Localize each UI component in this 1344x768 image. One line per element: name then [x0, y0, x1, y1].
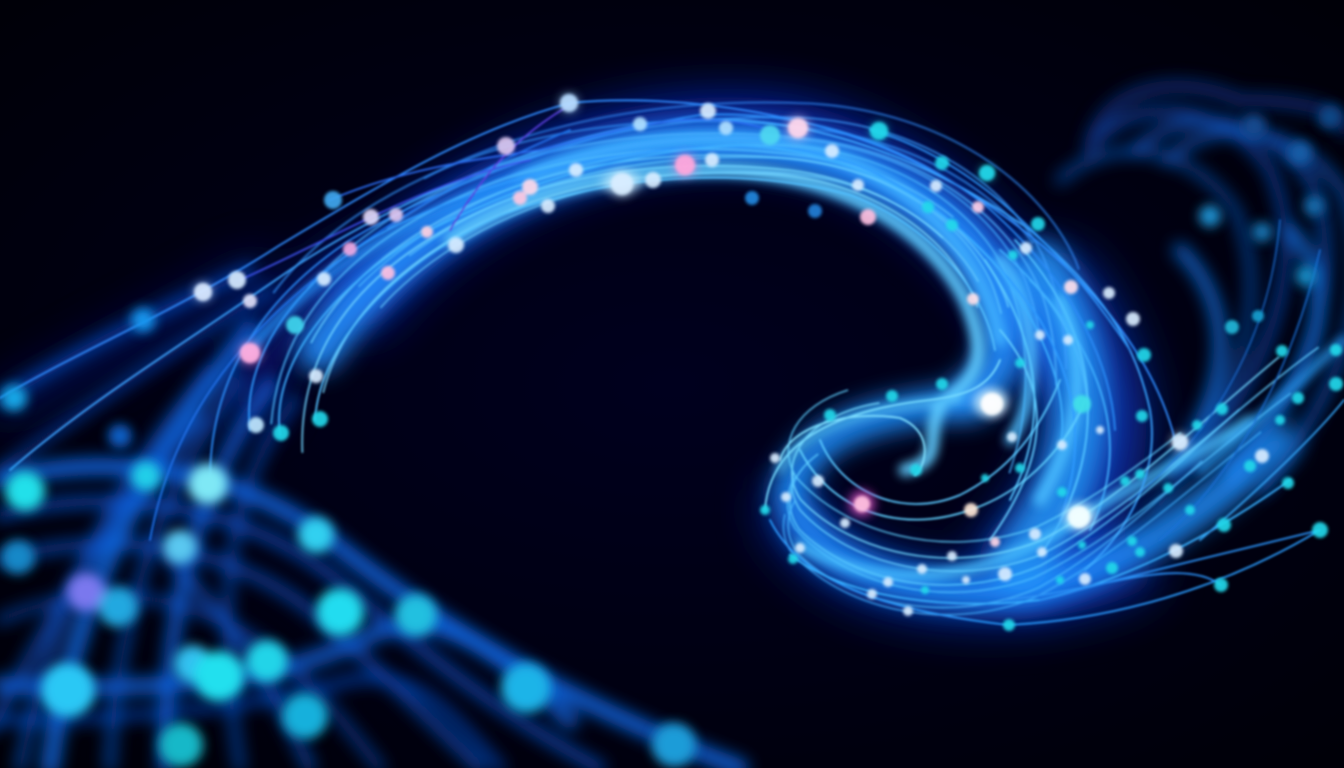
fibre bundle of lower curl	[765, 220, 1344, 625]
pale and pink fibre dots	[194, 94, 1269, 616]
magenta glow near swirl centre	[848, 489, 876, 517]
fibre bundle of upper arc	[0, 88, 1175, 587]
thick swirl core glow	[320, 143, 1280, 592]
central white-blue highlights	[600, 172, 1096, 528]
outer blue glow halo	[0, 127, 1130, 597]
blurred upper right strands	[1060, 86, 1344, 510]
blurred lower left strands	[0, 270, 740, 768]
small glowing halos of dots	[194, 94, 1188, 529]
medium glow strands	[250, 139, 1344, 575]
cyan fibre dots	[273, 122, 1343, 631]
